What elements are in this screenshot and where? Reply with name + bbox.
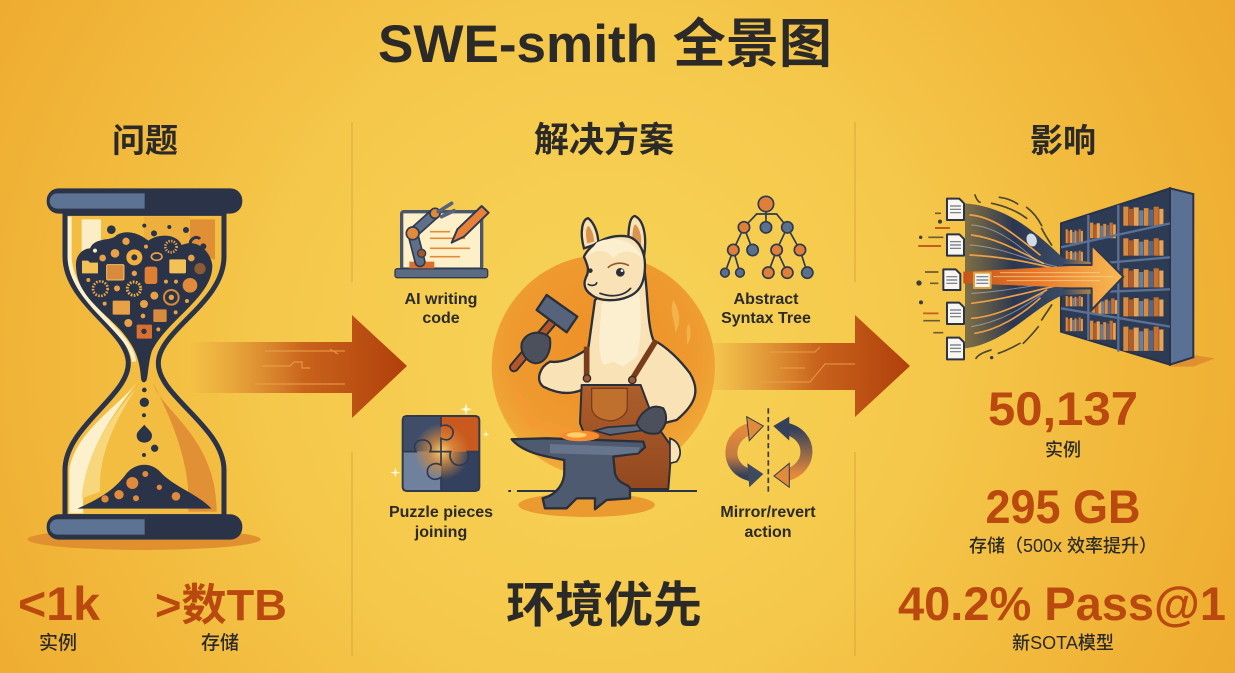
icons in the upper sand	[82, 238, 206, 339]
illustration: documents flowing into library	[916, 188, 1215, 367]
stat: 50,137 instances: 实例	[1045, 440, 1081, 460]
heading: impact: 影响	[1030, 122, 1096, 159]
stat: multiple TB storage: 存储	[201, 632, 239, 654]
stat: multiple TB storage	[155, 581, 287, 654]
icon: puzzle pieces	[390, 403, 490, 491]
label: AI writing code: code	[422, 310, 460, 327]
forge circle	[492, 255, 715, 478]
icon: AI writing code	[395, 203, 489, 278]
apron	[580, 385, 672, 489]
bookcase	[1170, 188, 1193, 365]
title: SWE-smith 全景图	[378, 15, 832, 74]
stat: fewer than 1k instances	[18, 577, 101, 654]
stat: multiple TB storage: >数TB	[155, 581, 287, 630]
label: AI writing code: AI writing	[405, 291, 477, 308]
label: mirror revert action: Mirror/revert	[720, 504, 816, 521]
label: puzzle pieces joining: Puzzle pieces	[389, 504, 493, 521]
anvil	[512, 438, 645, 509]
flame	[507, 387, 580, 433]
text: environment first: 环境优先	[506, 579, 702, 633]
icon: abstract syntax tree	[721, 196, 813, 278]
documents	[943, 199, 991, 359]
hammer	[514, 323, 552, 367]
tongs and glove	[595, 425, 641, 435]
stat: 40.2% Pass@1: 新SOTA模型	[1012, 633, 1114, 653]
hot metal	[561, 431, 599, 441]
label: mirror revert action: action	[744, 524, 792, 541]
arrow: solution to impact	[712, 315, 910, 417]
illustration: llama blacksmith	[492, 216, 715, 517]
stat: 295 GB storage: 295 GB	[986, 480, 1140, 533]
stat: 50,137 instances	[988, 382, 1138, 460]
stat: 50,137 instances: 50,137	[988, 382, 1138, 435]
llama body	[539, 262, 695, 423]
label: abstract syntax tree: Abstract	[734, 291, 798, 308]
stat: 40.2% Pass@1	[898, 577, 1226, 653]
stat: fewer than 1k instances: <1k	[18, 577, 101, 630]
llama head	[582, 218, 598, 248]
stat: 295 GB storage: 存储（500x 效率提升）	[969, 536, 1157, 556]
big arrow	[963, 245, 1123, 310]
stat: 295 GB storage	[969, 480, 1157, 556]
label: puzzle pieces joining: joining	[414, 524, 467, 541]
arrow: problem to solution	[190, 315, 407, 418]
heading: solution: 解决方案	[534, 121, 674, 160]
data stream	[965, 203, 1100, 348]
heading: problem: 问题	[112, 122, 178, 159]
icon: hourglass	[27, 188, 261, 550]
label: abstract syntax tree: Syntax Tree	[721, 310, 811, 327]
dividers	[352, 122, 855, 656]
stat: fewer than 1k instances: 实例	[39, 632, 77, 654]
stat: 40.2% Pass@1: 40.2% Pass@1	[898, 577, 1226, 630]
icon: mirror and revert arrows	[731, 408, 806, 495]
